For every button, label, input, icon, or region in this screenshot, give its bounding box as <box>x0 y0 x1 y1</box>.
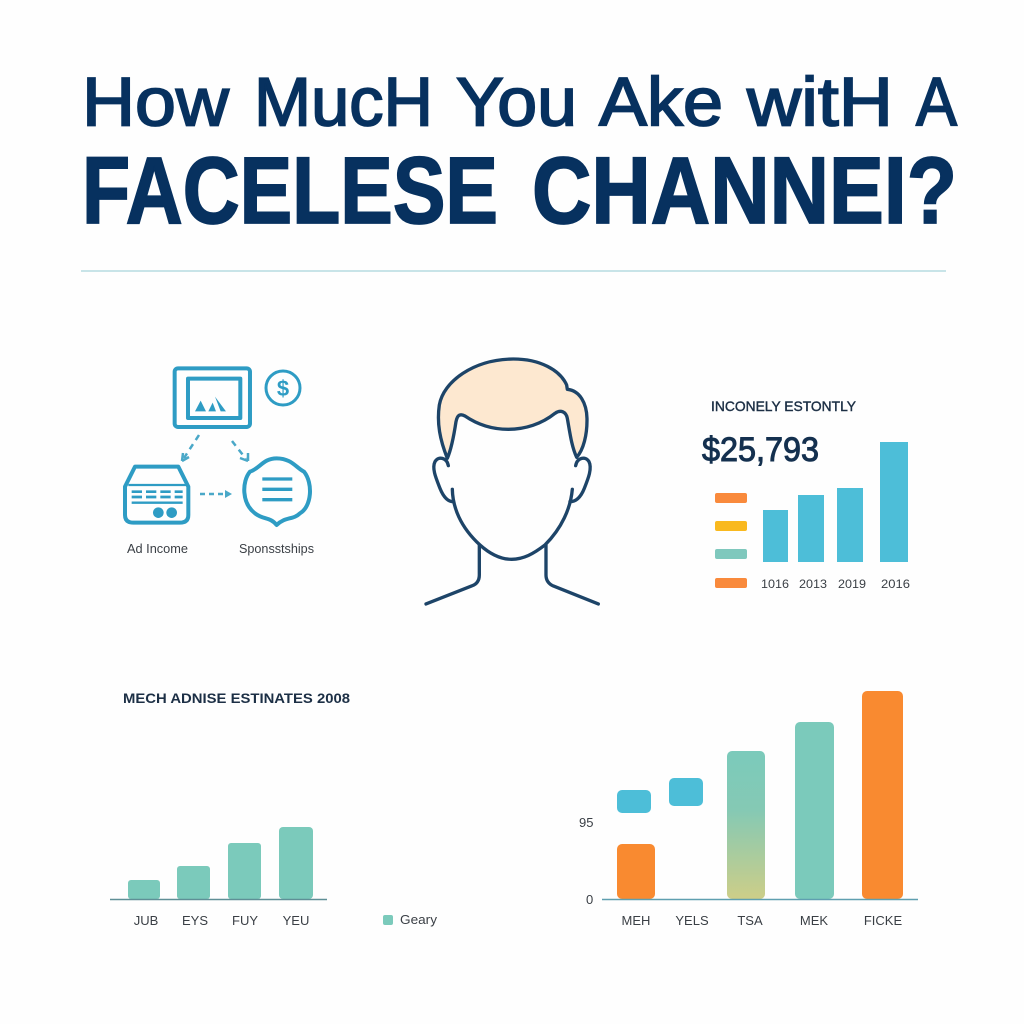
panel: income sources diagram <box>125 368 314 556</box>
y axis labels: 0 <box>586 892 593 907</box>
icon: dollar coin <box>266 371 300 405</box>
title <box>82 64 957 244</box>
title: MucH <box>254 64 433 140</box>
axis labels: FUY <box>232 913 258 928</box>
axis labels: EYS <box>182 913 208 928</box>
income figure: $25,793 <box>702 431 819 469</box>
axis labels: JUB <box>134 913 158 928</box>
arrow: monitor to sponsorships <box>232 441 248 461</box>
title: FACELESE <box>82 138 498 244</box>
icon: dollar coin: $ <box>277 376 289 401</box>
arrow: ad income to sponsorships <box>200 490 232 498</box>
panel: revenue comparison bars <box>579 691 918 928</box>
bar chart: income by year <box>763 442 908 562</box>
title: How <box>82 64 230 140</box>
neck <box>426 545 598 604</box>
title: You <box>456 64 577 140</box>
year axis labels: 1016 <box>761 577 789 591</box>
x axis labels <box>622 913 902 928</box>
legend swatches <box>715 493 747 588</box>
year axis labels: 2016 <box>881 577 910 591</box>
right ear <box>570 458 590 502</box>
icon: monitor with image <box>175 368 250 427</box>
label: ad income: Ad Income <box>127 541 188 556</box>
panel: monthly income estimate <box>702 398 910 591</box>
x axis labels: MEK <box>800 913 828 928</box>
x axis labels: MEH <box>622 913 650 928</box>
year axis labels: 2019 <box>838 577 866 591</box>
x axis labels: YELS <box>675 913 709 928</box>
bar chart: mixed colours <box>617 691 903 899</box>
label: sponsorships: Sponsstships <box>239 541 314 556</box>
axis labels: YEU <box>283 913 309 928</box>
axis labels <box>134 913 309 928</box>
title: A <box>916 64 957 140</box>
icon: ad income storefront <box>125 467 188 523</box>
chart heading: INCONELY ESTONTLY <box>711 398 857 414</box>
face outline <box>452 489 572 559</box>
title: CHANNEI? <box>532 138 957 244</box>
left ear <box>434 458 453 502</box>
arrow: monitor to ad income <box>182 435 199 461</box>
chart heading: MECH ADNISE ESTINATES 2008 <box>123 690 350 706</box>
x axis labels: TSA <box>737 913 763 928</box>
bar chart: merchandise <box>128 827 313 899</box>
y axis labels <box>579 815 593 907</box>
panel: merchandise estimates <box>110 690 438 928</box>
icon: sponsorships speech bubble <box>244 458 310 525</box>
title: witH <box>746 64 893 140</box>
x axis labels: FICKE <box>864 913 902 928</box>
legend: Geary <box>400 912 438 927</box>
hair <box>438 359 587 458</box>
year axis labels <box>761 577 910 591</box>
y axis labels: 95 <box>579 815 593 830</box>
legend <box>383 912 438 927</box>
icon: faceless head <box>426 359 598 604</box>
title: Ake <box>599 64 723 140</box>
year axis labels: 2013 <box>799 577 827 591</box>
